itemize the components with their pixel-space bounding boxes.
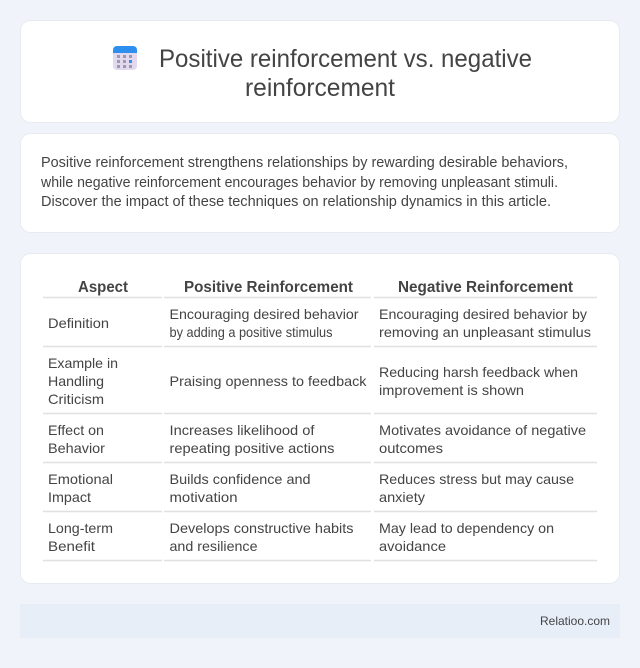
intro text: Discover the impact of these techniques on relationship dynamics in this article.	[41, 194, 551, 210]
intro text	[40, 155, 568, 210]
row: example in handling criticism: Praising openness to feedback	[170, 373, 368, 389]
title	[159, 45, 532, 102]
row: long-term benefit: May lead to dependency on	[379, 520, 554, 536]
row: long-term benefit: avoidance	[379, 538, 446, 554]
table header: Positive Reinforcement	[184, 279, 354, 296]
row: example in handling criticism: Criticism	[48, 391, 104, 407]
footer text: Relatioo.com	[540, 614, 610, 628]
row: effect on behavior: Effect on	[48, 422, 104, 438]
title: reinforcement	[245, 74, 395, 102]
row: effect on behavior: Increases likelihood of	[170, 422, 315, 438]
row: definition: Encouraging desired behavior	[170, 306, 359, 322]
row: example in handling criticism: Example in	[48, 355, 118, 371]
row: emotional impact: Emotional	[48, 471, 113, 487]
row: emotional impact	[48, 471, 574, 505]
table header: Negative Reinforcement	[398, 279, 574, 296]
row: effect on behavior: repeating positive actions	[170, 440, 334, 456]
row: example in handling criticism: improvement is shown	[379, 382, 524, 398]
row: effect on behavior: outcomes	[379, 440, 443, 456]
table header	[78, 279, 574, 296]
row: long-term benefit: Benefit	[48, 538, 95, 554]
row: definition: Encouraging desired behavior by	[379, 306, 587, 322]
row: effect on behavior: Behavior	[48, 440, 105, 456]
row: definition: by adding a positive stimulus	[170, 324, 332, 340]
panel: comparison table	[20, 254, 620, 584]
intro text: while negative reinforcement encourages behavior by removing unpleasant stimuli.	[40, 175, 558, 191]
row: example in handling criticism	[48, 355, 578, 407]
row: example in handling criticism: Reducing harsh feedback when	[379, 364, 578, 380]
panel: introduction	[20, 134, 620, 232]
row: emotional impact: anxiety	[379, 489, 425, 505]
row: emotional impact: Impact	[48, 489, 91, 505]
intro text: Positive reinforcement strengthens relationships by rewarding desirable behaviors,	[41, 155, 568, 171]
panel: title card	[20, 20, 620, 122]
row: definition: removing an unpleasant stimulus	[379, 324, 591, 340]
row: long-term benefit: Long-term	[48, 520, 113, 536]
row: effect on behavior	[48, 422, 586, 456]
row: definition: Definition	[48, 315, 109, 331]
title: Positive reinforcement vs. negative	[159, 45, 532, 73]
table header: Aspect	[78, 279, 129, 296]
icon: calendar	[113, 46, 137, 70]
row: long-term benefit: Develops constructive habits	[170, 520, 354, 536]
row: emotional impact: Builds confidence and	[170, 471, 310, 487]
row: effect on behavior: Motivates avoidance of negative	[379, 422, 586, 438]
row: definition	[48, 306, 591, 340]
row: emotional impact: Reduces stress but may cause	[379, 471, 574, 487]
footer bar	[20, 604, 620, 638]
row: example in handling criticism: Handling	[48, 373, 104, 389]
row: long-term benefit: and resilience	[170, 538, 258, 554]
row: emotional impact: motivation	[170, 489, 238, 505]
row: long-term benefit	[48, 520, 554, 554]
